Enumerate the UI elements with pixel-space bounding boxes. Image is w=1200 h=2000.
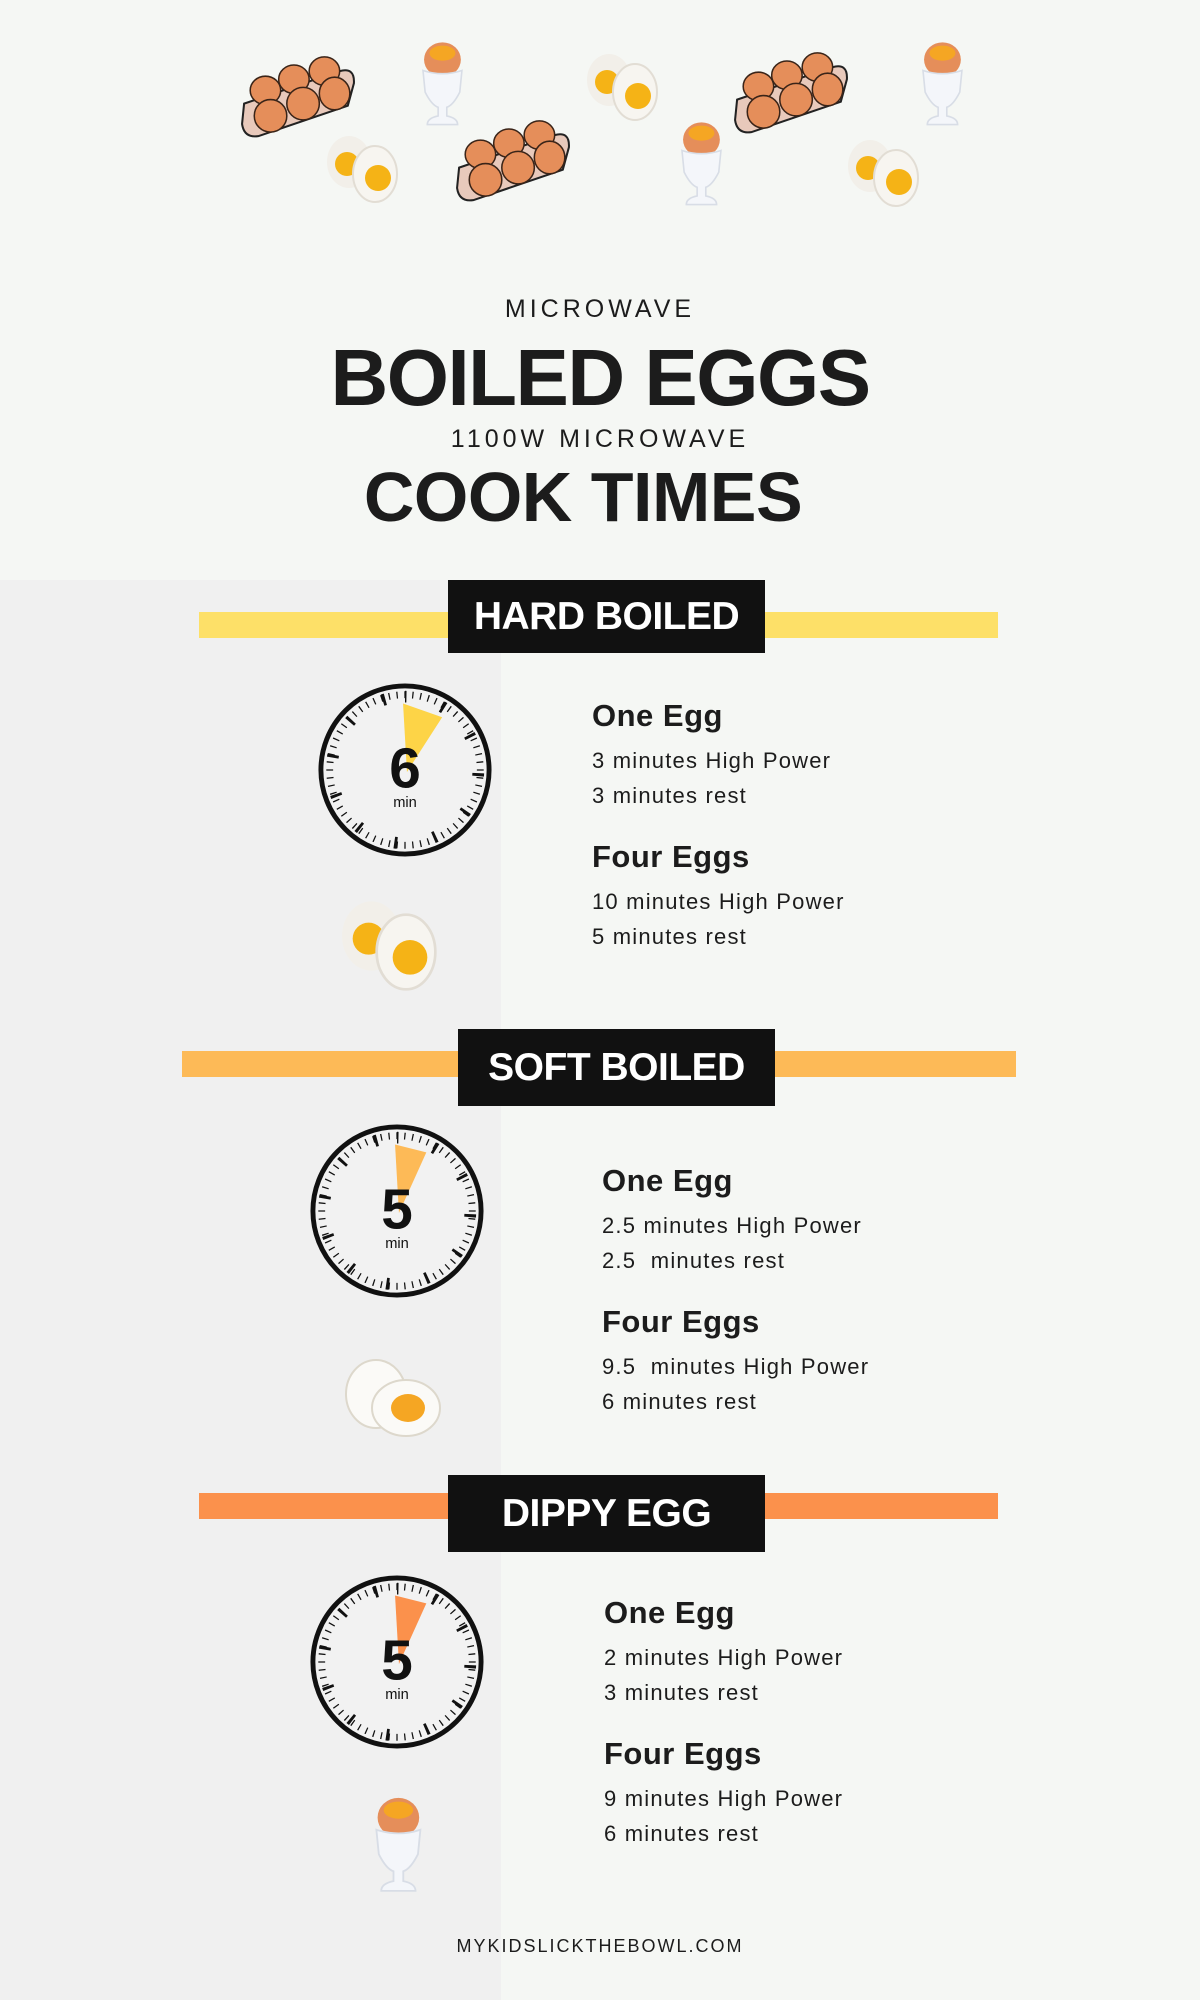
clock 5 min dippy: 5	[381, 1630, 413, 1693]
text: one egg: One Egg	[592, 698, 723, 733]
title block: COOK TIMES	[364, 458, 802, 536]
label: soft boiled	[458, 1029, 775, 1106]
label: hard boiled	[448, 580, 765, 653]
clock 5 min dippy	[310, 1576, 484, 1748]
footer: MYKIDSLICKTHEBOWL.COM	[456, 1936, 744, 1956]
clock 6 min	[318, 684, 492, 856]
text: soft times	[602, 1163, 869, 1414]
text: soft times: 6 minutes rest	[602, 1389, 757, 1414]
clock 6 min: min	[393, 795, 417, 811]
icon: soft egg	[345, 1359, 441, 1437]
text: soft times: 2.5 minutes High Power	[602, 1213, 862, 1238]
text: dippy times: Four Eggs	[604, 1736, 762, 1771]
text: dippy times: 9 minutes High Power	[604, 1786, 843, 1811]
text: one egg: Four Eggs	[592, 839, 750, 874]
section: dippy egg	[199, 1475, 998, 1892]
text: one egg: 3 minutes rest	[592, 783, 747, 808]
label: dippy egg	[448, 1475, 765, 1552]
text: soft times: 2.5 minutes rest	[602, 1248, 785, 1273]
text: dippy times: 2 minutes High Power	[604, 1645, 843, 1670]
title block: 1100W MICROWAVE	[451, 425, 749, 453]
text: one egg: 10 minutes High Power	[592, 889, 845, 914]
text: one egg: 3 minutes High Power	[592, 748, 831, 773]
clock 5 min: min	[385, 1236, 409, 1252]
section: soft boiled	[182, 1029, 1016, 1437]
clock 5 min: 5	[381, 1179, 413, 1242]
left panel background	[0, 580, 501, 2000]
icon: halved eggs	[352, 914, 436, 990]
text: one egg	[592, 698, 845, 949]
title block	[330, 295, 870, 536]
illustrations: top eggs	[241, 42, 963, 207]
label: dippy egg: DIPPY EGG	[502, 1492, 711, 1534]
clock 5 min dippy: min	[385, 1687, 409, 1703]
title block: MICROWAVE	[505, 295, 695, 323]
clock 5 min	[310, 1124, 484, 1298]
title block: BOILED EGGS	[330, 333, 870, 422]
label: soft boiled: SOFT BOILED	[488, 1046, 745, 1088]
label: hard boiled: HARD BOILED	[474, 594, 739, 638]
text: soft times: One Egg	[602, 1163, 733, 1198]
text: soft times: 9.5 minutes High Power	[602, 1354, 869, 1379]
text: dippy times: 6 minutes rest	[604, 1821, 759, 1846]
section: hard boiled	[199, 580, 998, 990]
text: one egg: 5 minutes rest	[592, 924, 747, 949]
text: dippy times: 3 minutes rest	[604, 1680, 759, 1705]
text: dippy times	[604, 1595, 843, 1846]
text: dippy times: One Egg	[604, 1595, 735, 1630]
icon: egg cup	[376, 1798, 422, 1892]
clock 6 min: 6	[389, 738, 421, 801]
text: soft times: Four Eggs	[602, 1304, 760, 1339]
